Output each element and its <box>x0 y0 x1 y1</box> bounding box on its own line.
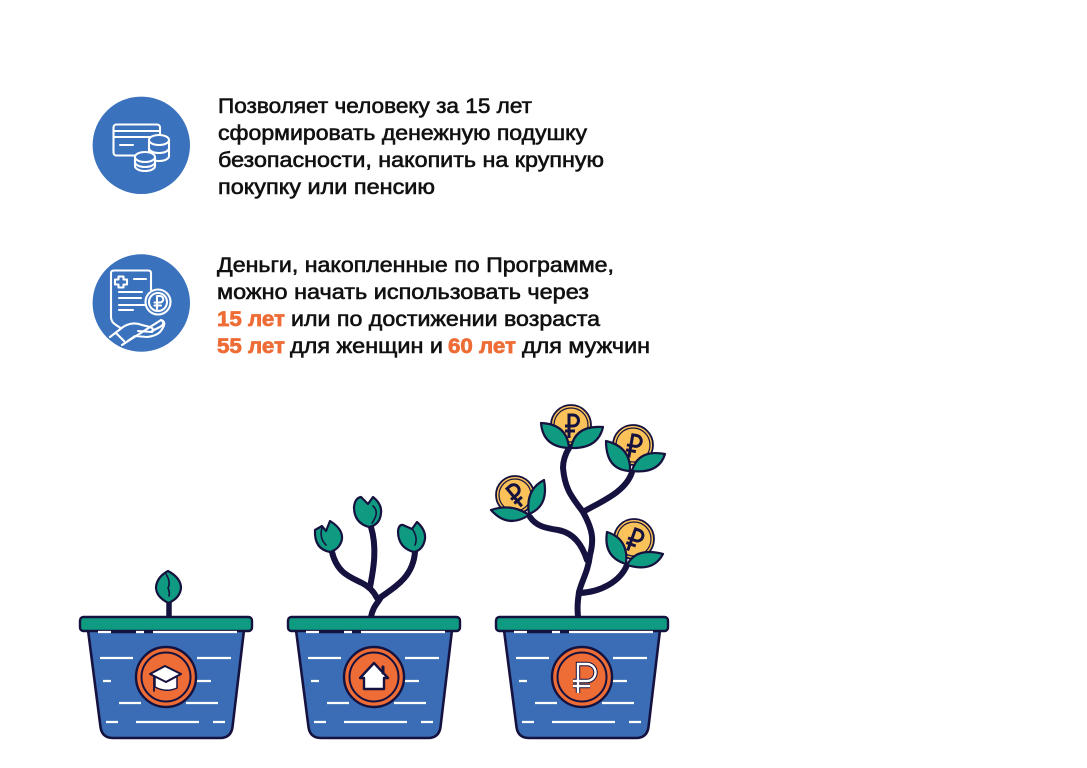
tree branches <box>530 448 632 617</box>
icon: ruble sign <box>573 664 596 693</box>
pot 1: sprout and education <box>80 571 252 738</box>
text block: savings purpose: Позволяет человеку за 15 лет <box>218 95 532 118</box>
text block: when money is available <box>217 254 650 358</box>
text block: savings purpose: сформировать денежную подушку <box>218 122 588 145</box>
coin: lower right <box>606 519 663 567</box>
text block: when money is available: 60 лет <box>448 335 516 358</box>
pot 2: young plant and home <box>288 497 460 738</box>
text block: when money is available: или по достижении возраста <box>291 308 600 331</box>
text block: savings purpose <box>218 95 604 199</box>
icon: graduation cap <box>150 666 181 691</box>
text block: when money is available: 55 лет <box>217 335 285 358</box>
text block: when money is available: можно начать использовать через <box>217 281 589 304</box>
text block: when money is available: 15 лет <box>217 308 285 331</box>
coin: top <box>541 405 603 448</box>
coin: upper right <box>606 425 665 471</box>
icon: card and coins <box>93 97 190 194</box>
icon: house <box>360 663 388 689</box>
icon: document, hand and coin <box>93 254 190 352</box>
text block: savings purpose: безопасности, накопить на крупную <box>218 149 604 172</box>
branches with buds <box>315 497 425 617</box>
text block: when money is available: Деньги, накопленные по Программе, <box>217 254 614 277</box>
text block: when money is available: для мужчин <box>522 335 650 358</box>
sprout <box>156 571 181 617</box>
pot 3: money tree and ruble <box>491 405 668 738</box>
text block: savings purpose: покупку или пенсию <box>218 176 435 199</box>
coin: left <box>491 476 545 521</box>
text block: when money is available: для женщин и <box>290 335 443 358</box>
